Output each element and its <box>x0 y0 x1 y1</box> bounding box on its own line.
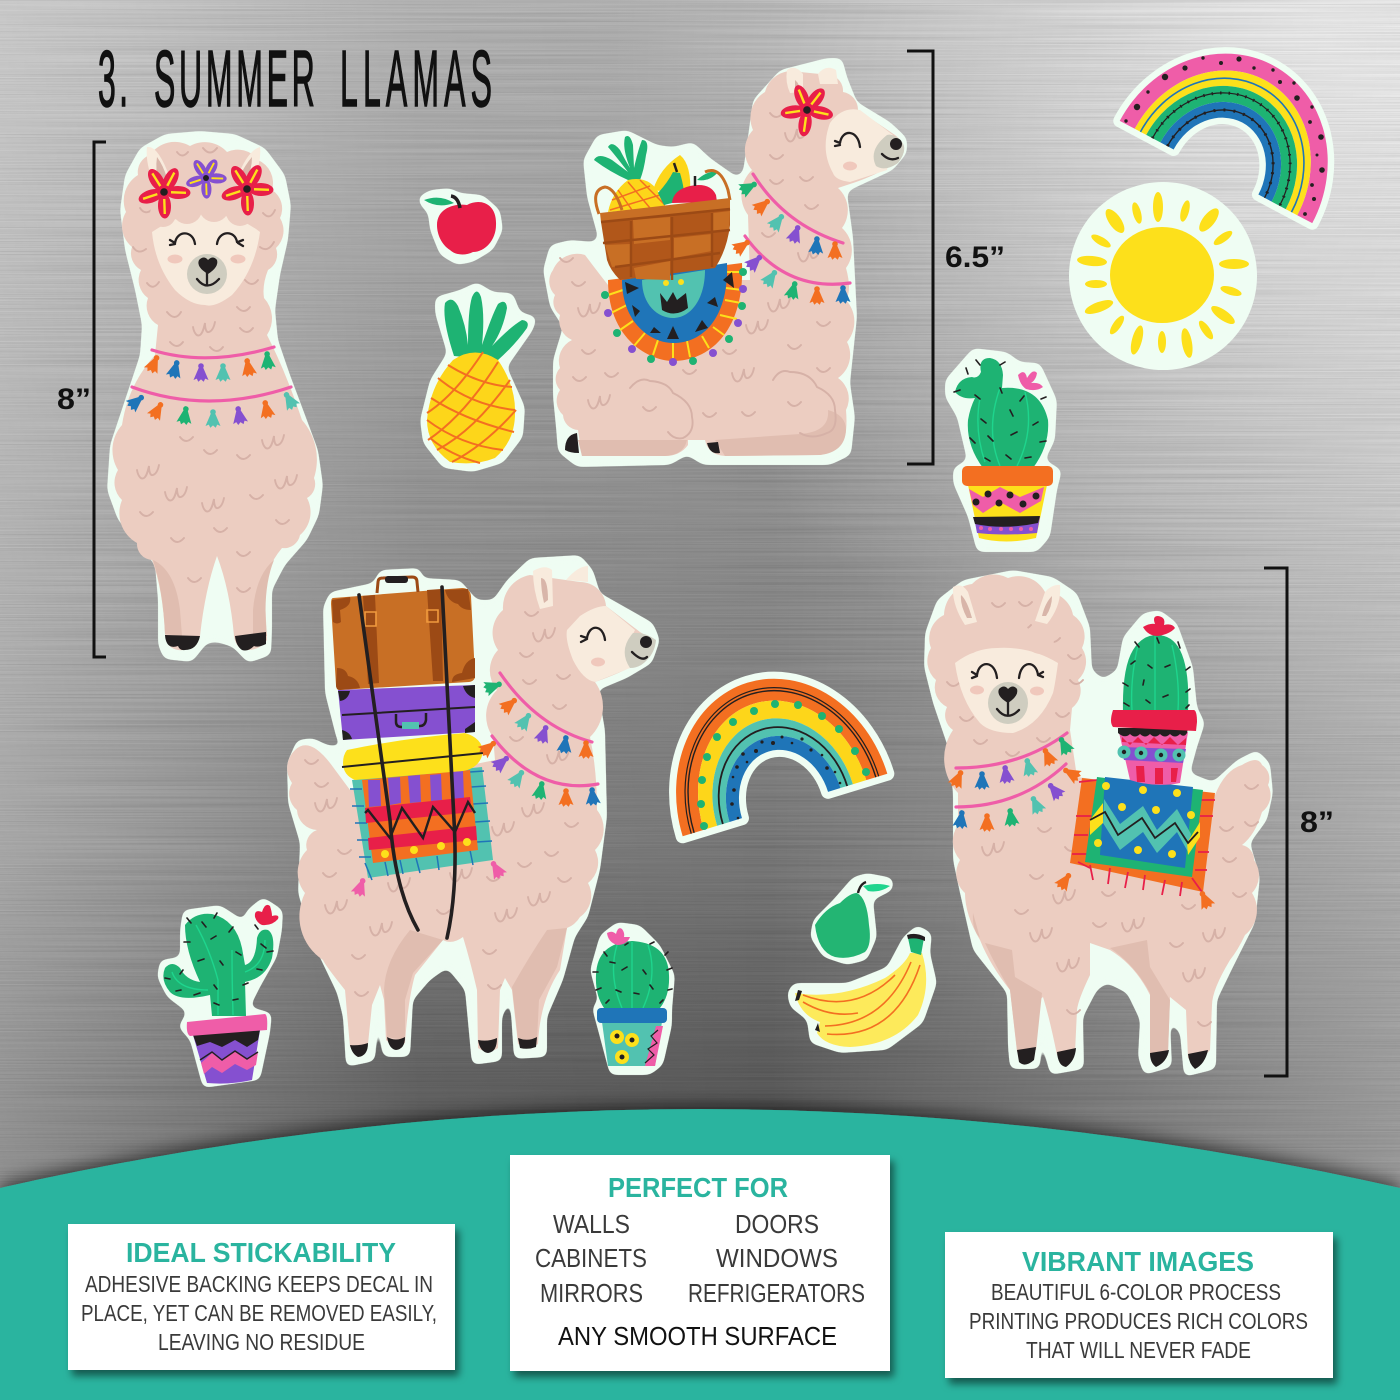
teal curved footer band <box>0 1109 1400 1400</box>
saguaro cactus sticker: pink pot <box>157 897 283 1088</box>
card: ideal stickability: LEAVING NO RESIDUE <box>158 1329 365 1355</box>
ears <box>147 147 260 188</box>
tassel necklaces <box>476 673 601 807</box>
pear sticker <box>810 873 893 965</box>
tassel necklaces <box>947 733 1083 832</box>
card: ideal stickability: IDEAL STICKABILITY <box>126 1237 396 1268</box>
card: vibrant images: PRINTING PRODUCES RICH COLORS <box>969 1308 1308 1334</box>
round cactus sticker: blue pot <box>590 922 675 1075</box>
card: vibrant images: BEAUTIFUL 6-COLOR PROCESS <box>991 1279 1281 1305</box>
rainbow sticker: orange <box>645 651 887 836</box>
head <box>786 68 838 93</box>
fur marks <box>305 612 578 996</box>
luggage llama sticker <box>287 555 660 1067</box>
sun sticker <box>1069 182 1257 370</box>
title: 3. <box>98 34 128 123</box>
card: perfect for: PERFECT FOR <box>608 1172 788 1203</box>
card: perfect for: MIRRORS <box>540 1278 643 1308</box>
card: ideal stickability: PLACE, YET CAN BE REMOVED EASILY, <box>81 1300 437 1326</box>
card: vibrant images <box>945 1232 1333 1378</box>
title <box>98 34 492 123</box>
card: perfect for: REFRIGERATORS <box>688 1278 865 1308</box>
card: perfect for: DOORS <box>735 1209 819 1239</box>
card: ideal stickability <box>68 1224 455 1370</box>
rainbow sticker: pink <box>1120 14 1369 223</box>
card: perfect for <box>510 1155 890 1371</box>
saddle blanket <box>1053 777 1216 911</box>
blanket with zigzags <box>350 767 508 898</box>
tassel necklaces <box>730 174 850 305</box>
ears <box>953 585 1060 625</box>
banana sticker <box>787 925 937 1053</box>
head <box>533 566 588 609</box>
card: perfect for: WALLS <box>553 1209 630 1239</box>
dimension label 8 inch left: 8” <box>57 383 91 416</box>
card: vibrant images: THAT WILL NEVER FADE <box>1026 1337 1251 1363</box>
flower crown <box>137 157 274 219</box>
face <box>152 212 260 306</box>
stacked luggage <box>331 576 483 938</box>
bracket: 6.5 inch <box>907 51 933 464</box>
card: perfect for: WINDOWS <box>716 1243 838 1273</box>
fur marks <box>947 602 1258 1026</box>
card: ideal stickability: ADHESIVE BACKING KEEPS DECAL IN <box>85 1271 433 1297</box>
fur marks <box>133 148 297 592</box>
card: vibrant images: VIBRANT IMAGES <box>1022 1246 1254 1277</box>
tassel necklaces <box>124 347 301 428</box>
card: perfect for: ANY SMOOTH SURFACE <box>558 1321 837 1351</box>
llama sticker: sitting with fruit basket <box>543 58 907 467</box>
title: SUMMER <box>154 34 315 123</box>
hooves <box>165 632 266 650</box>
fur marks <box>560 113 836 438</box>
cactus sticker: orange pot <box>945 348 1062 552</box>
flower <box>776 79 838 141</box>
llama sticker: right, cactus on blanket <box>924 570 1273 1077</box>
fruit basket <box>594 136 730 280</box>
dimension label 8 inch right: 8” <box>1300 806 1334 839</box>
apple sticker <box>418 188 503 265</box>
dimension label 6.5 inch: 6.5” <box>945 241 1005 274</box>
card: perfect for: CABINETS <box>535 1243 647 1273</box>
half-round saddle blanket <box>601 263 747 366</box>
bracket: 8 inch left <box>94 142 106 657</box>
title: LLAMAS <box>340 34 492 123</box>
llama sticker: front-facing with flower crown <box>107 131 323 663</box>
potted cactus on saddle <box>1111 616 1197 785</box>
bracket: 8 inch right <box>1264 568 1287 1076</box>
pineapple sticker <box>420 282 537 472</box>
face <box>955 648 1058 733</box>
